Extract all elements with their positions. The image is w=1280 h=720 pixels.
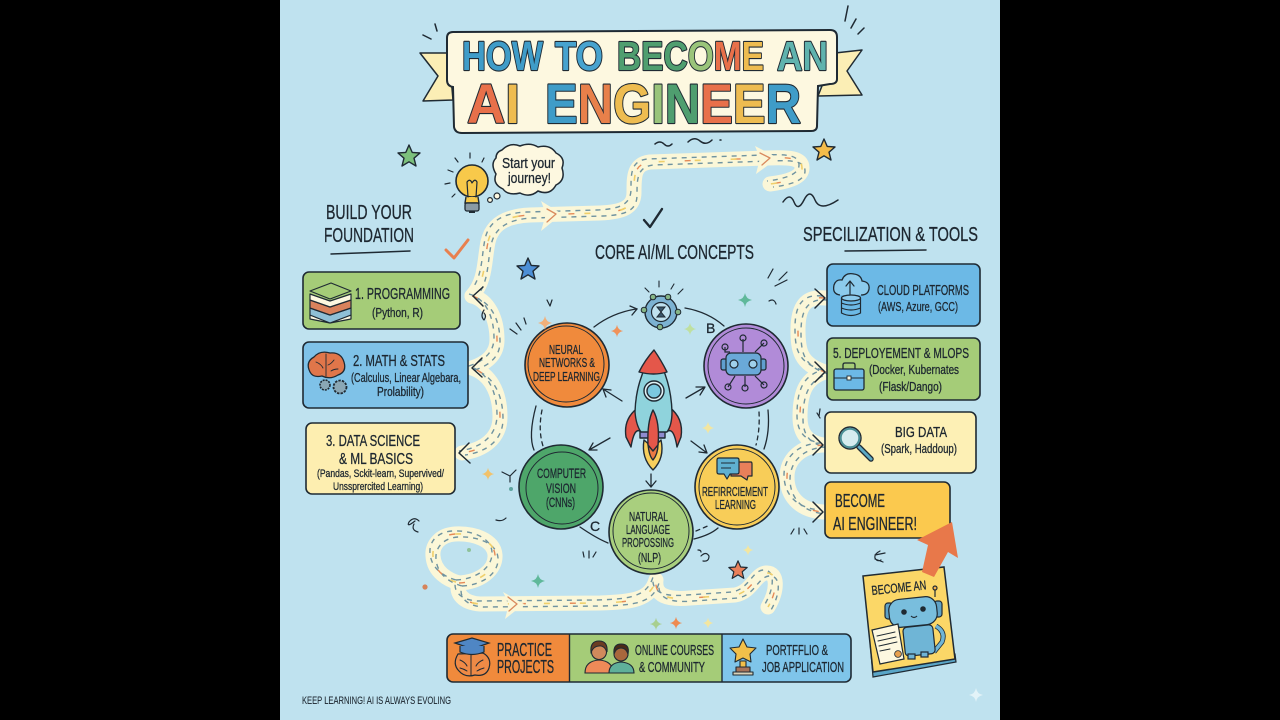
right fin [668,407,682,447]
concept: neural networks [525,323,609,407]
panel: 3 data science and ML basics: 3. DATA SCIENCE [326,433,420,450]
letter labels B and C [590,320,715,534]
journey trail: left bracket [459,287,503,463]
concept: reinforcement learning [695,445,779,529]
decorative ticks around title [423,6,864,207]
panel: cloud platforms [827,264,980,326]
icon: black check [644,209,662,227]
bottom bar: next steps: PROJECTS [497,657,554,677]
icon: robot network [721,335,767,391]
bottom bar: next steps: PORTFFLIO & [766,643,828,659]
right ribbon [818,50,862,96]
concept: natural language processing: PROPOSSING [622,535,674,550]
banner body [447,30,837,133]
panel: 3 data science and ML basics [306,423,455,494]
panel: become AI engineer [825,482,950,538]
document [872,624,904,664]
concept: computer vision: (CNNs) [546,495,575,510]
icon: yellow star [813,139,835,160]
bottom bar: next steps: & COMMUNITY [639,660,705,676]
icon: cloud and database [834,274,869,316]
poster: become an AI engineer robot: BECOME AN [871,577,927,598]
panel: deployment and MLOps [827,338,980,400]
panel: 1 programming: 1. PROGRAMMING [355,286,450,303]
title banner: AN [777,33,828,79]
panel: big data [825,412,976,473]
panel: become AI engineer: AI ENGINEER! [833,514,917,534]
concept: neural networks: DEEP LEARNING [533,369,600,384]
title banner: BECOME [617,33,764,79]
background panel [280,0,1000,720]
icon: light bulb [445,153,488,213]
panel: deployment and MLOps: (Flask/Dango) [879,379,942,394]
panel: cloud platforms: (AWS, Azure, GCC) [878,299,958,314]
bottom bar: next steps: PRACTICE [497,640,552,660]
journey trail: top path [469,146,805,299]
icon: gear at top of ring [641,281,683,330]
panel: 2 math and stats: 2. MATH & STATS [353,353,445,370]
journey trail: right bracket [784,289,828,522]
poster: become an AI engineer robot [863,567,956,677]
panel: big data: (Spark, Haddoup) [881,441,957,456]
panel: 2 math and stats: Prolability) [377,384,424,399]
title line 2: AI [467,72,520,135]
flame [643,440,662,470]
concept: neural networks: NETWORKS & [539,355,595,370]
icon: blue star [517,258,539,279]
footer note: KEEP LEARNING! AI IS ALWAYS EVOLING [302,695,451,707]
nozzle [640,431,665,438]
concept: computer vision: VISION [546,481,576,496]
concept: natural language processing: (NLP) [638,550,661,565]
letter labels B and C: C [590,518,600,534]
icon: chat bubbles [717,458,752,480]
concept: computer vision [519,445,603,529]
left fin [626,407,640,447]
title banner [420,30,862,135]
center fin [648,410,658,451]
concept: reinforcement learning: LEARNING [715,497,756,512]
heading: specialization and tools: SPECILIZATION & TOOLS [803,224,978,246]
panel: cloud platforms: CLOUD PLATFORMS [877,282,969,299]
colored sparkles [422,293,983,702]
icon: orange check [446,240,468,258]
bottom bar: next steps: JOB APPLICATION [762,660,844,676]
concept: neural networks: NEURAL [549,342,583,357]
concept: reinforcement learning: REFIRRCIEMENT [702,484,768,499]
concept: natural language processing [609,490,693,574]
panel: 3 data science and ML basics: & ML BASICS [339,451,413,468]
title banner: TO [555,33,603,79]
nose cone [639,350,667,374]
bottom bar: next steps: ONLINE COURSES [635,643,714,659]
concept: natural language processing: NATURAL [629,509,668,524]
icon: brain with gears [308,352,346,394]
icon: rocket [626,350,682,470]
left ribbon [420,53,453,101]
icon: briefcase [834,363,864,390]
center ring connectors [531,306,768,543]
icon: magnifier [839,427,871,459]
panel: deployment and MLOps: (Docker, Kubernates [869,362,959,377]
concept: robotics / AI circle [704,324,788,408]
icon: brain with graduation cap [455,638,490,676]
icon: orange star [729,561,747,578]
panel: 2 math and stats: (Calculus, Linear Algebara, [351,370,461,385]
panel: 3 data science and ML basics: (Pandas, Sckit-learn, Supervived/ [317,468,445,480]
title line 1: HOW [462,33,543,79]
speech cloud: start your journey: journey! [507,170,551,187]
bottom bar: next steps [447,634,851,682]
porthole [644,381,664,401]
concept: natural language processing: LANGUAGE [626,522,670,537]
orange arrow to poster [917,522,958,577]
small doodle marks [408,269,885,562]
panel: 3 data science and ML basics: Unssprercited Learning) [333,481,423,493]
panel: deployment and MLOps: 5. DEPLOYEMENT & MLOPS [833,345,969,362]
heading: build your foundation: FOUNDATION [324,225,414,247]
icon: two people [585,641,634,673]
concept: computer vision: COMPUTER [537,466,586,481]
icon: green star [398,145,420,166]
title banner: ENGINEER [545,72,801,135]
letter labels B and C: B [706,320,715,336]
icon: trophy [730,639,756,675]
icon: books [310,283,351,323]
speech cloud: start your journey: Start your [502,155,555,172]
panel: become AI engineer: BECOME [835,491,885,511]
body [635,352,672,432]
speech cloud: start your journey [488,144,563,202]
heading: build your foundation: BUILD YOUR [326,202,412,224]
robot [885,586,943,659]
heading: build your foundation [324,202,414,254]
panel: 1 programming: (Python, R) [372,305,423,320]
panel: big data: BIG DATA [895,424,947,441]
panel: 1 programming [303,272,460,329]
panel: 2 math and stats [303,342,468,408]
journey trail: bottom path [430,531,778,619]
heading: core AI/ML concepts: CORE AI/ML CONCEPTS [595,242,754,264]
